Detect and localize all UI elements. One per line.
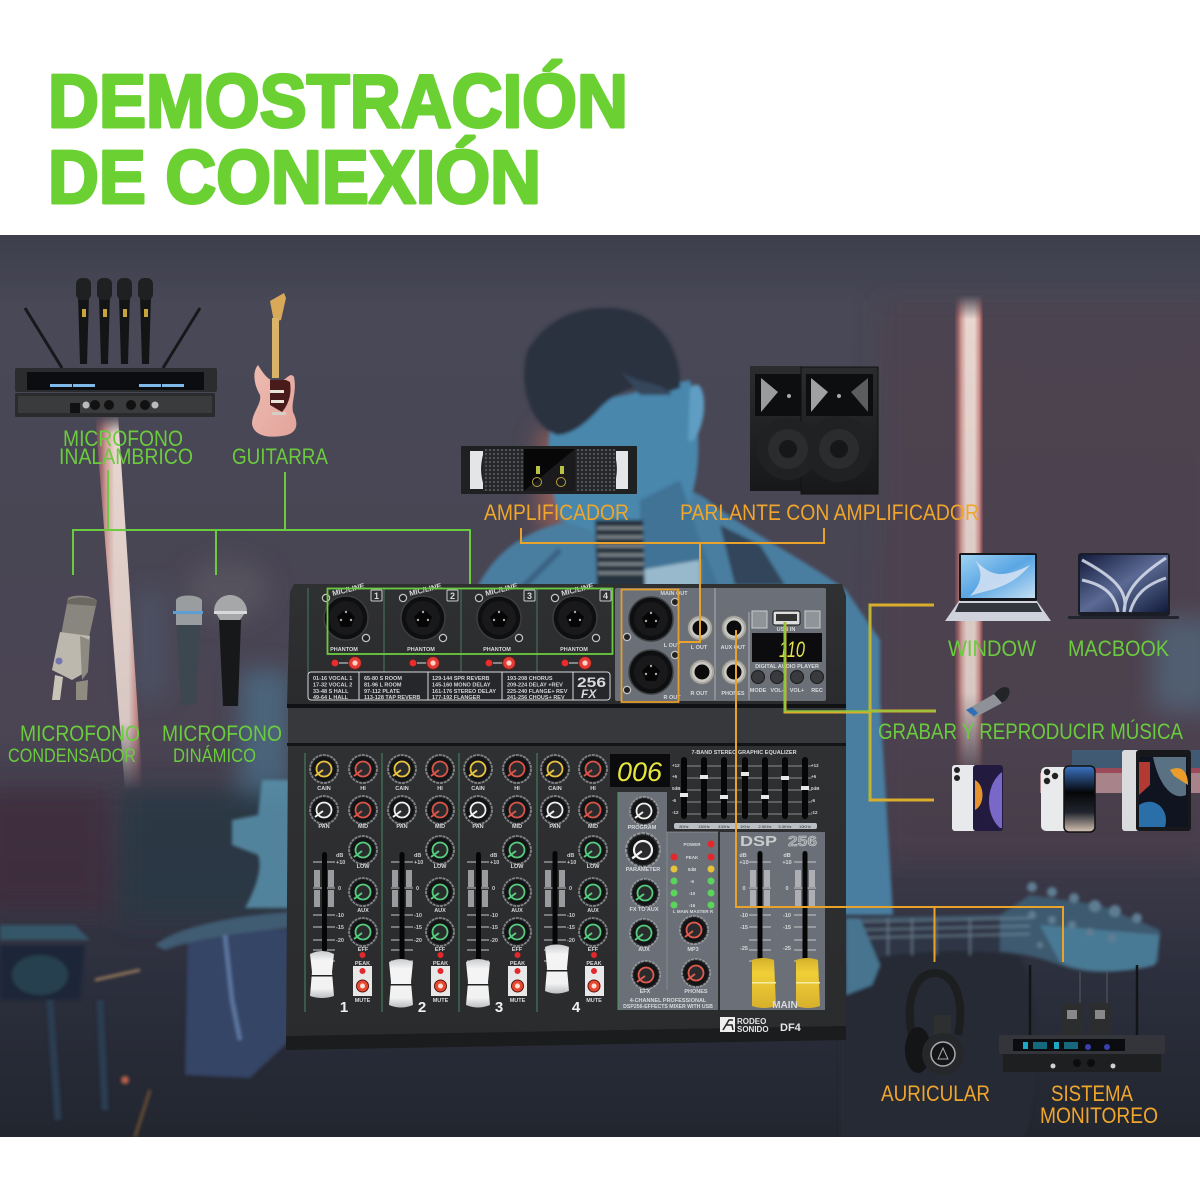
master faders panel (720, 832, 825, 1011)
7-band graphic equalizer: 160Hz (698, 824, 710, 829)
channel 1 strip: MUTE (355, 998, 371, 1004)
channel 4 strip: MID (588, 824, 598, 830)
FX preset table: 177-192 FLANGER (432, 695, 480, 701)
mic/line input channels: PHANTOM (330, 647, 358, 653)
channel 3 strip: MUTE (510, 998, 526, 1004)
FX preset table: 81-96 L ROOM (364, 682, 402, 688)
channel 1 strip: 0 (338, 886, 341, 892)
main out and digital player panel: REC (811, 688, 823, 694)
channel 1 strip: dB (336, 853, 343, 859)
effects and master panel: PARAMETER (626, 867, 660, 873)
mic/line input channels: MIC/LINE (408, 581, 442, 598)
label: micrófono dinámico: MICROFONO (162, 721, 282, 746)
channel 3 strip: LOW (511, 864, 524, 870)
channel 3 strip: HI (514, 786, 520, 792)
channel 4 strip: -20 (567, 938, 575, 944)
master faders panel: -15 (740, 925, 748, 931)
preset display: 006 (617, 757, 663, 787)
icon: wireless microphone system (15, 278, 217, 417)
master faders panel: 0 (785, 886, 789, 892)
mic/line input channels: 4 (603, 591, 608, 601)
channel 3 strip: 0 (492, 886, 495, 892)
7-band graphic equalizer: -12 (672, 810, 679, 815)
orange connection lines: aux out to headphones and monitors (736, 630, 1063, 962)
main out and digital player panel: VOL+ (790, 688, 804, 694)
mic/line input channels: MIC/LINE (331, 581, 365, 598)
master faders panel: -10 (783, 913, 791, 919)
master faders panel: 0 (742, 886, 746, 892)
effects and master panel: EFX (640, 989, 651, 995)
channel 1 strip: -10 (336, 913, 344, 919)
7-band graphic equalizer (672, 750, 820, 829)
icon: headphones (905, 973, 964, 1075)
blue electric guitar in background (846, 880, 1162, 996)
channel 1 strip: HI (360, 786, 366, 792)
main out and digital player panel: L OUT (691, 645, 708, 651)
mic/line input channels: 3 (527, 591, 532, 601)
icon: iphone (1041, 766, 1095, 832)
icon: monitor system (999, 965, 1165, 1072)
master faders panel: -15 (783, 925, 791, 931)
channel 3 strip: CAIN (471, 786, 485, 792)
channel 2 strip: PEAK (433, 961, 448, 967)
green outline: mic/line inputs (328, 588, 612, 654)
brand logo: SONIDO (737, 1025, 769, 1034)
channel 3 strip: PAN (472, 824, 484, 830)
FX preset table: 145-160 MONO DELAY (432, 682, 491, 688)
main out and digital player panel: L OUT (664, 643, 681, 649)
7-band graphic equalizer: -6 (672, 798, 676, 803)
effects and master panel: -5 (690, 879, 694, 884)
main out and digital player panel: USB IN (777, 627, 795, 633)
label: parlante con amplificador: PARLANTE CON AMPLIFICADOR (680, 500, 979, 525)
channel 2 strip: HI (437, 786, 443, 792)
channel 2 strip: -15 (414, 925, 422, 931)
icon: speakers (750, 366, 878, 494)
channel 2 strip: CAIN (395, 786, 409, 792)
label: window: WINDOW (948, 636, 1036, 661)
channel 4 strip: AUX (587, 908, 599, 914)
mic/line input channels: MIC/LINE (560, 581, 594, 598)
channel 1 strip: -20 (336, 938, 344, 944)
7-band graphic equalizer: 80Hz (679, 824, 689, 829)
label: micrófono condensador (8, 721, 140, 767)
effects and master panel: -16 (689, 903, 696, 908)
master faders panel: dB (783, 853, 791, 859)
FX preset table: 113-128 TAP REVERB (364, 695, 420, 701)
FX preset table: 65-80 S ROOM (364, 676, 402, 682)
icon: android phone (952, 765, 1003, 831)
icon: power amplifier (461, 446, 637, 494)
7-band graphic equalizer: 7-BAND STEREO GRAPHIC EQUALIZER (691, 750, 797, 756)
channel 4 strip: -10 (567, 913, 575, 919)
channel 3 strip: 3 (495, 999, 503, 1016)
icon: dynamic microphones (173, 595, 247, 706)
channel 2 strip: -20 (414, 938, 422, 944)
label: sistema monitoreo: MONITOREO (1040, 1103, 1158, 1128)
master faders panel: dB (739, 853, 747, 859)
channel 2 strip: 2 (418, 999, 426, 1016)
channel 4 strip: PAN (549, 824, 561, 830)
effects and master panel: PEAK (686, 855, 699, 860)
pink neon tube left (95, 415, 143, 790)
label: sistema monitoreo (1040, 1081, 1158, 1128)
7-band graphic equalizer: 430Hz (718, 824, 730, 829)
mic/line input channels: PHANTOM (407, 647, 435, 653)
title (48, 59, 628, 219)
mic/line input channels: 1 (374, 591, 379, 601)
channel 2 strip: MUTE (433, 998, 449, 1004)
channel 1 strip: AUX (357, 908, 369, 914)
FX preset table: 161-176 STEREO DELAY (432, 689, 496, 695)
channel 3 strip: PEAK (510, 961, 525, 967)
main out and digital player panel: PHONES (721, 691, 745, 697)
FX preset table: 97-112 PLATE (364, 689, 400, 695)
brand logo: RODEO (737, 1017, 766, 1026)
label: micrófono inalámbrico (59, 426, 193, 469)
main out and digital player panel: VOL- (770, 688, 784, 694)
channel 1 strip: PEAK (355, 961, 370, 967)
brand logo (720, 1017, 802, 1034)
master faders panel: -25 (740, 946, 748, 952)
master faders panel: +10 (782, 860, 792, 866)
7-band graphic equalizer: 5.3KHz (778, 824, 792, 829)
7-band graphic equalizer: 1KHz (740, 824, 750, 829)
channel 1 strip: PAN (318, 824, 330, 830)
channel 1 strip: MID (358, 824, 368, 830)
FX preset table: 209-224 DELAY +REV (507, 682, 563, 688)
icon: windows laptop (945, 553, 1051, 621)
mixer: rear input unit (287, 581, 846, 708)
channel 3 strip: -20 (490, 938, 498, 944)
channel 1 strip: EFF (358, 947, 369, 953)
mic/line input channels (322, 581, 611, 669)
channel 2 strip: MID (435, 824, 445, 830)
effects and master panel (618, 792, 718, 1010)
channel 4 strip: LOW (587, 864, 600, 870)
7-band graphic equalizer: 0dB (672, 786, 681, 791)
effects and master panel: PROGRAM (628, 825, 657, 831)
effects and master panel: PHONES (684, 989, 708, 995)
channel 4 strip: -15 (567, 925, 575, 931)
label: micrófono inalámbrico: INALAMBRICO (59, 444, 193, 469)
channel 1 strip: LOW (357, 864, 370, 870)
icon: condenser microphone (52, 596, 97, 700)
mic/line input channels: PHANTOM (483, 647, 511, 653)
effects and master panel: -10 (689, 891, 696, 896)
band in background right (1040, 750, 1200, 793)
channel 4 strip: +10 (567, 860, 576, 866)
channel 4 strip: dB (567, 853, 574, 859)
channel 4 strip: HI (590, 786, 596, 792)
master faders panel: -10 (740, 913, 748, 919)
main out and digital player panel: 110 (779, 637, 806, 662)
orange outline: main out (622, 590, 678, 702)
channel 3 strip: +10 (490, 860, 499, 866)
pink neon tube right (955, 295, 983, 780)
FX preset table: 49-64 L HALL (313, 695, 349, 701)
label: auricular: AURICULAR (881, 1081, 990, 1106)
channel 4 strip: 4 (572, 999, 581, 1016)
FX preset table: 225-240 FLANGE+ REV (507, 689, 568, 695)
channel 2 strip: EFF (435, 947, 446, 953)
FX preset table: 129-144 SPR REVERB (432, 676, 489, 682)
7-band graphic equalizer: 10KHz (799, 824, 811, 829)
channel 3 strip: -15 (490, 925, 498, 931)
main out and digital player panel: R OUT (690, 691, 708, 697)
channel 2 strip (388, 755, 454, 1016)
FX preset table (308, 672, 610, 701)
channel 2 strip: -10 (414, 913, 422, 919)
icon: macbook (1068, 553, 1179, 619)
icon: guitar (252, 293, 296, 437)
master faders panel: DSP (740, 833, 777, 850)
channel 3 strip: EFF (512, 947, 523, 953)
title: DE CONEXIÓN (48, 135, 541, 219)
channel 1 strip (310, 755, 377, 1016)
FX preset table: 241-256 CHOUS+ REV (507, 695, 565, 701)
effects and master panel: 4-CHANNEL PROFESSIONAL (630, 998, 707, 1004)
channel 3 strip: -10 (490, 913, 498, 919)
channel 3 strip: MID (512, 824, 522, 830)
brand logo: DF4 (780, 1022, 802, 1034)
channel 4 strip (541, 755, 607, 1016)
channel 4 strip: EFF (588, 947, 599, 953)
mixer: main control surface (286, 708, 846, 1050)
preset display (610, 754, 670, 787)
main out and digital player panel: DIGITAL AUDIO PLAYER (755, 664, 819, 670)
7-band graphic equalizer: +6 (672, 774, 678, 779)
channel 2 strip: 0 (416, 886, 419, 892)
effects and master panel: 0dB (688, 867, 697, 872)
main out and digital player panel: R OUT (663, 695, 681, 701)
FX preset table: 33-48 S HALL (313, 689, 349, 695)
7-band graphic equalizer: -6 (811, 798, 815, 803)
effects and master panel: AUX (638, 947, 650, 953)
label: sistema monitoreo: SISTEMA (1051, 1081, 1133, 1106)
master faders panel: -25 (783, 946, 791, 952)
effects and master panel: DSP256-EFFECTS MIXER WITH USB (623, 1004, 713, 1010)
channel 2 strip: dB (414, 853, 421, 859)
7-band graphic equalizer: -12 (811, 810, 818, 815)
orange connection lines: main out to amplifier and speakers (521, 528, 824, 642)
main out and digital player panel: AUX OUT (721, 645, 746, 651)
channel 1 strip: +10 (336, 860, 345, 866)
channel 1 strip: 1 (340, 999, 348, 1016)
channel 3 strip (464, 755, 531, 1016)
main out and digital player panel: MODE (750, 688, 767, 694)
main out and digital player panel: MAIN OUT (660, 591, 688, 597)
FX preset table: 17-32 VOCAL 2 (313, 682, 352, 688)
channel 3 strip: AUX (511, 908, 523, 914)
title: DEMOSTRACIÓN (48, 59, 628, 143)
label: micrófono dinámico (162, 721, 282, 767)
master faders panel: 256 (788, 833, 817, 850)
channel 1 strip: CAIN (317, 786, 331, 792)
blue performer (477, 306, 895, 917)
mic/line input channels: MIC/LINE (484, 581, 518, 598)
main out and digital player panel (615, 588, 826, 701)
icon: usb flash drive (966, 687, 1010, 718)
FX preset table: 193-208 CHORUS (507, 676, 553, 682)
effects and master panel: MP3 (687, 947, 699, 953)
effects and master panel: FX TO AUX (629, 907, 659, 913)
channel 2 strip: AUX (434, 908, 446, 914)
effects and master panel: POWER (683, 842, 701, 847)
FX preset table: 01-16 VOCAL 1 (313, 676, 352, 682)
channel 1 strip: -15 (336, 925, 344, 931)
drums in background (0, 780, 290, 1137)
label: guitarra: GUITARRA (232, 444, 328, 469)
FX preset table: 256 (577, 674, 606, 690)
master faders panel: +10 (739, 860, 749, 866)
7-band graphic equalizer: 2.5KHz (758, 824, 772, 829)
label: micrófono inalámbrico: MICROFONO (63, 426, 183, 451)
7-band graphic equalizer: +12 (811, 763, 819, 768)
channel 3 strip: dB (490, 853, 497, 859)
effects and master panel: L MAIN MASTER R (673, 909, 714, 914)
channel 4 strip: CAIN (548, 786, 562, 792)
channel 2 strip: LOW (434, 864, 447, 870)
green connection lines: microphones and guitar to mic inputs (73, 470, 470, 588)
icon: ipad (1122, 750, 1191, 831)
mic/line input channels: PHANTOM (560, 647, 588, 653)
label: amplificador: AMPLIFICADOR (484, 500, 629, 525)
label: micrófono condensador: CONDENSADOR (8, 746, 136, 767)
photo background: concert scene (0, 235, 1200, 1137)
channel 2 strip: +10 (414, 860, 423, 866)
connection bracket: usb to laptops, usb drive and phones (784, 605, 936, 800)
label: micrófono dinámico: DINÁMICO (173, 746, 256, 767)
channel 4 strip: 0 (569, 886, 572, 892)
mic/line input channels: 2 (450, 591, 455, 601)
7-band graphic equalizer: +6 (811, 774, 817, 779)
channel 4 strip: PEAK (586, 961, 602, 967)
channel 2 strip: PAN (396, 824, 408, 830)
channel 4 strip: MUTE (586, 998, 602, 1004)
7-band graphic equalizer: +12 (672, 763, 680, 768)
label: micrófono condensador: MICROFONO (20, 721, 140, 746)
FX preset table: FX (581, 687, 597, 701)
master faders panel: MAIN (772, 1000, 798, 1011)
7-band graphic equalizer: 0dB (811, 786, 820, 791)
label: macbook: MACBOOK (1068, 636, 1169, 661)
